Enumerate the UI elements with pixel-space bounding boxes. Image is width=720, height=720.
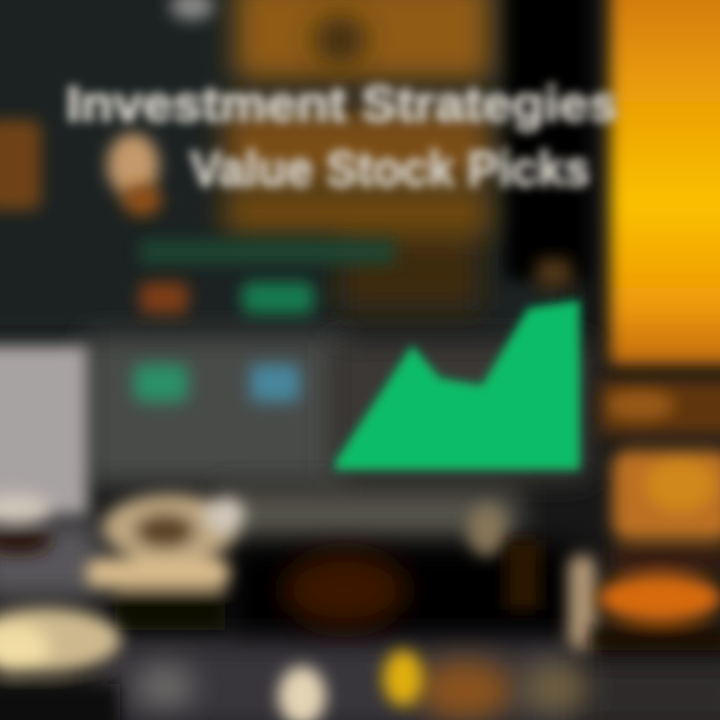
dark roundel at top xyxy=(314,16,366,64)
dark column behind glow xyxy=(505,0,590,280)
pale left panel xyxy=(0,345,88,515)
title xyxy=(66,76,618,197)
title: Value Stock Picks xyxy=(190,141,590,197)
stat chip: teal green xyxy=(134,364,188,402)
cup: left xyxy=(0,494,52,554)
stat chip: green xyxy=(242,282,314,314)
bottom coin: brown xyxy=(417,660,513,720)
bottom coin: yellow xyxy=(383,650,423,706)
dark bowl xyxy=(283,552,407,628)
green subtitle bar xyxy=(140,240,395,264)
bottom coin: grey xyxy=(135,664,195,708)
bottom coin: khaki xyxy=(521,662,589,714)
top pale spot xyxy=(170,0,214,20)
dark bottle xyxy=(505,540,541,610)
plate: centre left xyxy=(85,494,245,630)
bottle highlight xyxy=(467,504,507,556)
glowing orange column xyxy=(610,0,720,365)
stat chip: orange xyxy=(140,282,188,314)
stat chip: amber xyxy=(536,258,572,288)
bottom coin: cream xyxy=(278,666,326,720)
title: Investment Strategies xyxy=(66,76,618,132)
stacked orange pastries xyxy=(590,380,720,650)
pale bottle edge xyxy=(568,555,596,650)
left orange blob xyxy=(0,120,41,210)
plate: bottom left xyxy=(0,608,121,720)
green area chart xyxy=(335,300,580,470)
amber panel behind title xyxy=(225,0,490,310)
stat chip: blue xyxy=(250,364,300,402)
orange ampersand xyxy=(107,133,159,197)
